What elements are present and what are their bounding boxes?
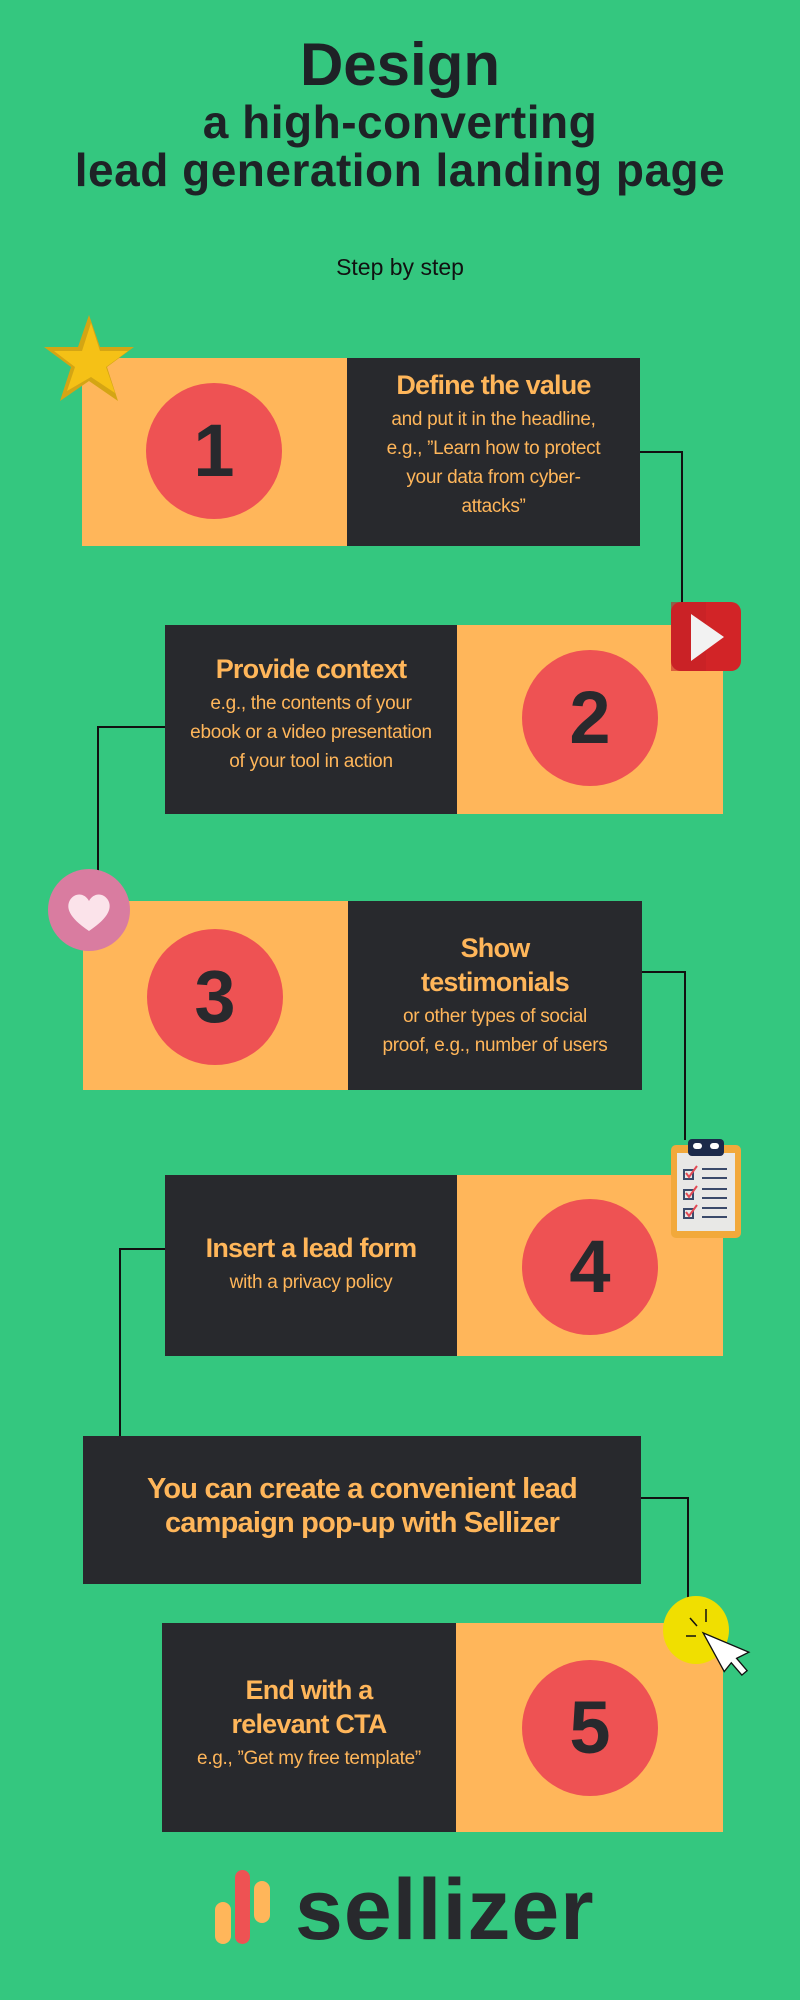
number 2: 2: [569, 676, 611, 759]
step 4 card: [165, 1175, 723, 1356]
step 2 card: [165, 625, 723, 814]
step 2 text: ebook or a video presentation: [190, 722, 432, 743]
icon: video play: [671, 602, 741, 671]
step 1 text: attacks”: [461, 496, 526, 517]
step 2 text: e.g., the contents of your: [210, 693, 412, 714]
number 4: [522, 1199, 658, 1335]
number 1: 1: [193, 409, 235, 492]
icon: star: [44, 315, 134, 401]
title: [75, 31, 725, 196]
step 5 text: End with a: [245, 1675, 372, 1705]
callout: popup box: You can create a convenient lead: [147, 1473, 577, 1505]
title: Design: [300, 31, 500, 98]
title: lead generation landing page: [75, 144, 725, 196]
step 4 text: [206, 1233, 416, 1293]
icon: clipboard: [671, 1139, 741, 1238]
step 5 text: [197, 1675, 421, 1769]
logo wordmark: sellizer: [295, 1862, 595, 1958]
step 5 text: relevant CTA: [232, 1709, 386, 1739]
number 5: 5: [569, 1686, 611, 1769]
step 2 text: of your tool in action: [229, 751, 393, 772]
number 4: 4: [569, 1225, 611, 1308]
step 1 card: [82, 358, 640, 546]
step 4 text: with a privacy policy: [230, 1272, 392, 1293]
icon: heart: [48, 869, 130, 951]
callout: popup box: campaign pop-up with Sellizer: [165, 1507, 559, 1539]
step 3 card: [83, 901, 642, 1090]
callout: popup box: [83, 1436, 641, 1584]
step 3 text: testimonials: [421, 967, 569, 997]
number 5: [522, 1660, 658, 1796]
subtitle: Step by step: [336, 254, 464, 280]
step 1 text: e.g., ”Learn how to protect: [387, 438, 600, 459]
step 1 text: [387, 370, 600, 517]
step 5 text: e.g., ”Get my free template”: [197, 1748, 421, 1769]
step 2 text: [190, 654, 432, 772]
step 3 text: or other types of social: [403, 1006, 587, 1027]
logo bars: [215, 1902, 231, 1944]
step 3 text: Show: [461, 933, 529, 963]
logo: [215, 1862, 595, 1958]
icon: cursor click: [663, 1596, 750, 1676]
step 1 text: Define the value: [396, 370, 591, 400]
step 5 card: [162, 1623, 723, 1832]
step 1 text: your data from cyber-: [406, 467, 581, 488]
number 1: [146, 383, 282, 519]
step 1 text: and put it in the headline,: [391, 409, 596, 430]
step 3 text: proof, e.g., number of users: [382, 1035, 608, 1056]
step 2 text: Provide context: [216, 654, 406, 684]
number 3: 3: [194, 955, 236, 1038]
step 3 text: [382, 933, 608, 1056]
title: a high-converting: [203, 96, 597, 148]
number 3: [147, 929, 283, 1065]
step 4 text: Insert a lead form: [206, 1233, 416, 1263]
number 2: [522, 650, 658, 786]
